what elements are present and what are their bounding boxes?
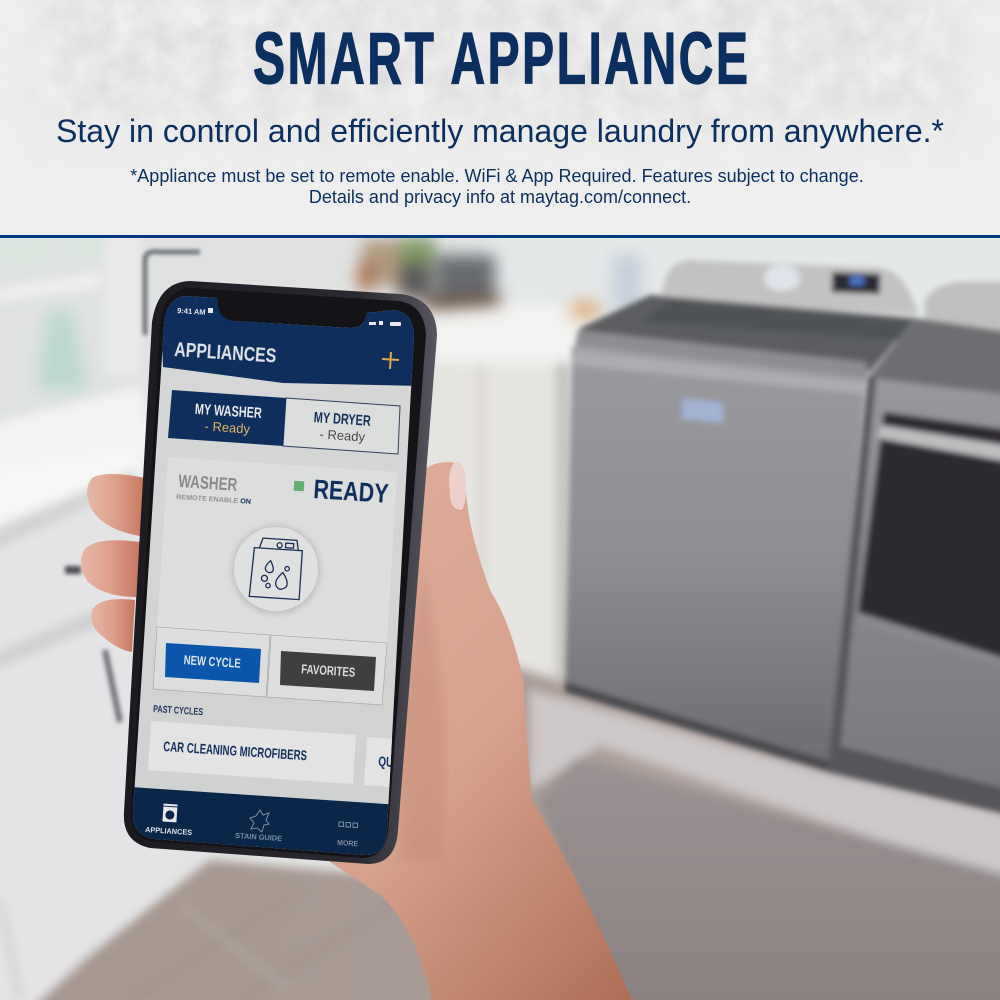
wall left [0, 235, 430, 425]
favorites panel: FAVORITES [301, 661, 356, 680]
washer rim [575, 330, 868, 378]
rug [537, 757, 1000, 1000]
dryer front [828, 378, 1000, 815]
footnote: *Appliance must be set to remote enable. WiFi & App Required. Features subject to change. [130, 166, 864, 186]
tab: my washer: - Ready [204, 419, 251, 436]
thumb nail [449, 462, 466, 510]
washer base [565, 682, 832, 772]
status bar: 9:41 AM [177, 306, 206, 317]
washer front [565, 346, 866, 772]
ready label: READY [313, 474, 389, 509]
footnote [130, 166, 864, 207]
icon: stain guide [250, 810, 269, 832]
hand and wrist [150, 462, 632, 1000]
icon: more [339, 822, 358, 828]
gap between washer and dryer [828, 376, 876, 772]
dryer panel [925, 282, 1000, 340]
app title: APPLIANCES [174, 339, 277, 368]
right cabinets [430, 365, 570, 680]
photo: blurred laundry room background [0, 230, 1000, 1000]
phone [120, 280, 437, 870]
bottle [38, 310, 86, 390]
back countertop [430, 304, 600, 372]
washer status card [157, 474, 394, 642]
tab: my washer: MY WASHER [194, 401, 262, 422]
phone notch [217, 297, 367, 327]
washer logo [682, 398, 723, 423]
tab: my dryer: MY DRYER [313, 409, 371, 430]
index finger [87, 474, 145, 536]
icon: appliances [162, 804, 178, 822]
card heading: WASHER [178, 471, 238, 495]
favorites panel [267, 635, 387, 705]
header band [0, 0, 1000, 238]
past cycle card, partial [364, 737, 395, 787]
window [0, 230, 112, 262]
dryer handle [878, 425, 1000, 462]
plants and tray [362, 240, 410, 290]
washer lid [580, 295, 915, 372]
remote enable label: REMOTE ENABLE ON [176, 494, 251, 506]
past cycle card, partial: QU [378, 753, 394, 770]
tab: my dryer [283, 398, 400, 454]
status light [294, 481, 304, 491]
past cycle card [148, 721, 356, 784]
new cycle panel: NEW CYCLE [183, 652, 241, 671]
dryer top [868, 318, 1000, 395]
app header [162, 296, 414, 386]
past cycle card: CAR CLEANING MICROFIBERS [163, 738, 308, 763]
main countertop [0, 385, 160, 545]
bottom navigation [133, 787, 388, 855]
phone body [124, 281, 437, 864]
washer control panel [640, 260, 918, 315]
hand holding phone [81, 462, 632, 1000]
bottom navigation: STAIN GUIDE [235, 831, 282, 843]
phone screen [132, 296, 414, 855]
bottom navigation: APPLIANCES [145, 825, 192, 837]
tab: my washer [168, 390, 286, 446]
middle finger [81, 540, 140, 597]
add icon [382, 352, 399, 369]
faucet [145, 252, 200, 335]
left cabinets [0, 480, 170, 1000]
new cycle panel [153, 627, 270, 697]
thumb shade [400, 560, 445, 860]
wall tile right [480, 235, 1000, 365]
tab: my dryer: - Ready [319, 427, 366, 444]
title: SMART APPLIANCE [253, 19, 748, 100]
status bar [177, 306, 401, 326]
light floor tile by appliances [530, 690, 1000, 885]
left cabinet handles [65, 566, 81, 574]
dryer door [858, 412, 1000, 660]
washer icon button [231, 525, 321, 615]
divider bar [0, 235, 1000, 238]
subtitle: Stay in control and efficiently manage laundry from anywhere.* [56, 113, 944, 149]
past cycles label: PAST CYCLES [153, 704, 204, 718]
footnote: Details and privacy info at maytag.com/connect. [309, 187, 691, 207]
ring finger [91, 599, 135, 652]
floor [20, 660, 1000, 1000]
bottom navigation: MORE [337, 838, 358, 848]
